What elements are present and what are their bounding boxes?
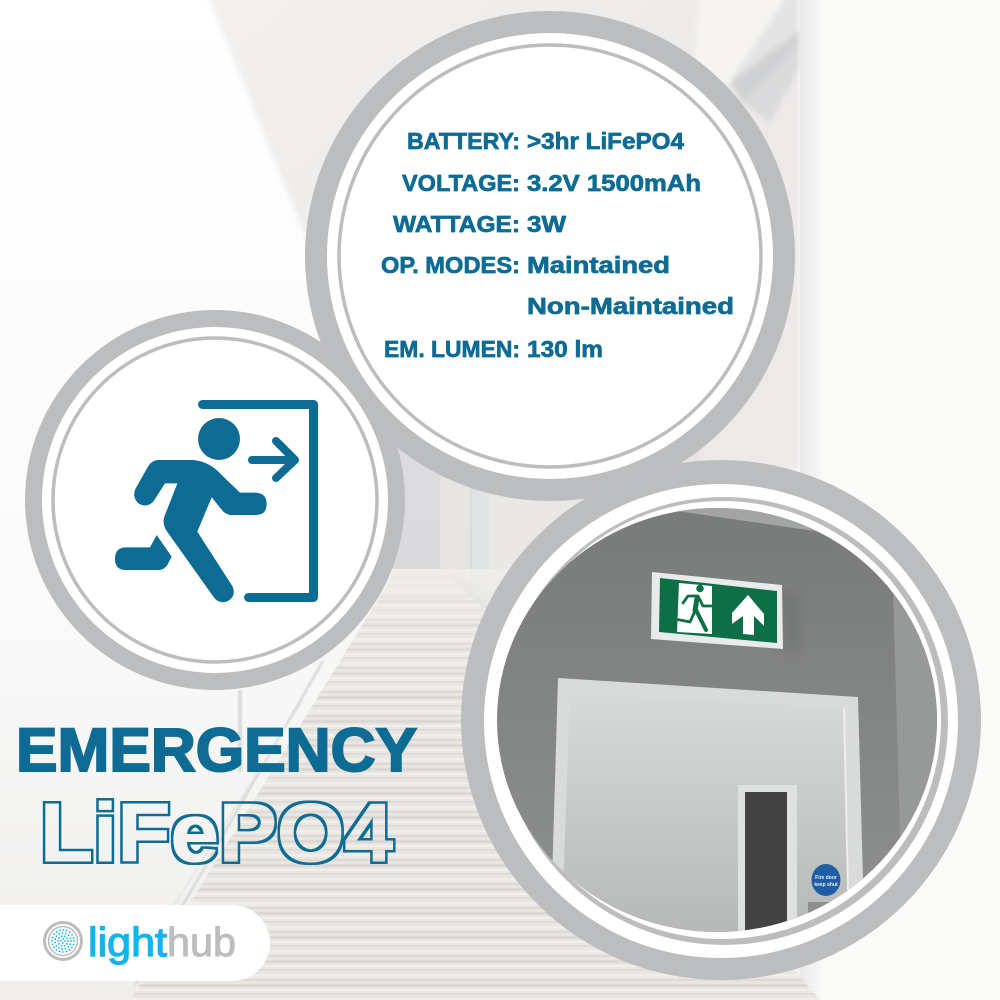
spec: voltage: 3.2V 1500mAh: [527, 170, 701, 196]
title: EMERGENCY: EMERGENCY: [16, 716, 417, 784]
spec: operating modes: Maintained: [527, 252, 670, 278]
icon: running person: [115, 418, 267, 602]
circle: exit icon panel: [25, 310, 405, 690]
spec: operating modes: Non-Maintained: [527, 293, 734, 319]
circle: exit sign photo panel: [461, 460, 981, 980]
icon: door frame: [202, 404, 314, 598]
fire door sticker: keep shut: [814, 882, 838, 888]
spec: voltage: VOLTAGE:: [402, 170, 520, 196]
photo: door and sign: [490, 500, 950, 950]
spec: emergency lumen: [384, 336, 603, 362]
spec: battery: BATTERY:: [407, 128, 520, 154]
logo pill: [0, 905, 270, 981]
spec: emergency lumen: 130 lm: [527, 336, 603, 362]
title: LiFePO4 outline: LiFePO4: [40, 786, 393, 879]
circle: specifications panel: [305, 11, 795, 501]
spec: operating modes: OP. MODES:: [381, 252, 520, 278]
spec: emergency lumen: EM. LUMEN:: [384, 336, 520, 362]
spec: wattage: [393, 211, 566, 237]
logo wordmark: [88, 919, 236, 965]
fire door sticker: Fire door: [815, 875, 837, 881]
spec: operating modes: [381, 252, 734, 319]
spec: voltage: [402, 170, 701, 196]
logo wordmark: hub: [167, 919, 236, 965]
exit sign: [651, 572, 800, 652]
logo wordmark: light: [88, 919, 168, 965]
spec: wattage: WATTAGE:: [393, 211, 520, 237]
spec: battery: [407, 128, 684, 154]
spec: battery: >3hr LiFePO4: [527, 128, 684, 154]
spec: wattage: 3W: [527, 211, 566, 237]
fire door sticker: [812, 864, 840, 896]
logo icon: [44, 922, 82, 960]
icon: arrow: [252, 441, 295, 478]
